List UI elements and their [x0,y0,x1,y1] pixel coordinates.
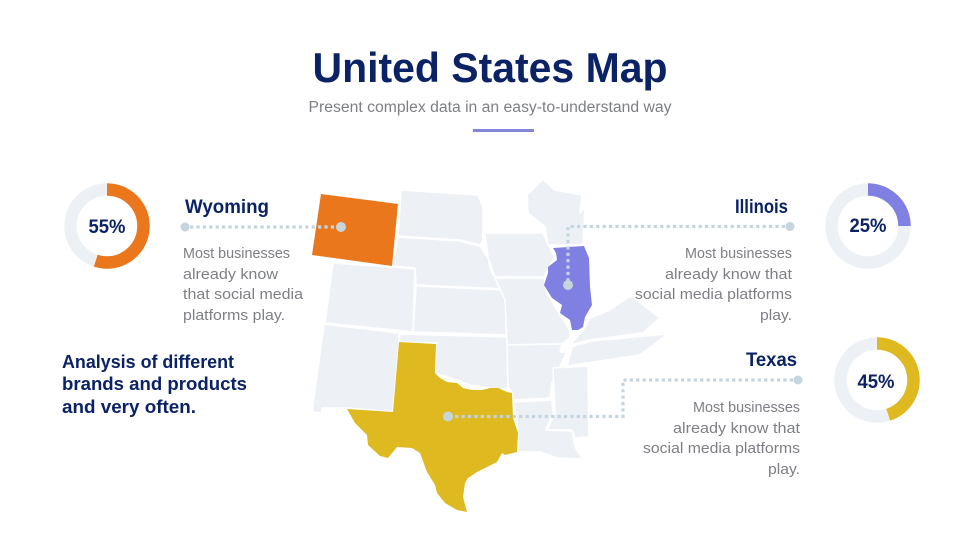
illinois callout [563,197,794,324]
state: Oklahoma [399,334,509,390]
illinois donut: 25% [850,216,887,237]
texas donut [840,344,914,416]
state: South Dakota [398,190,483,245]
illinois callout: Most businesses [685,246,792,262]
state: Missouri [495,278,570,345]
texas callout: social media platforms [643,441,800,457]
state: Iowa [485,233,555,277]
texas callout: play. [768,462,800,478]
wyoming callout [180,197,346,324]
illinois callout: already know that [665,267,792,283]
state: Nebraska [392,237,505,289]
state: Mississippi [547,366,589,438]
state: Kansas [413,286,510,335]
state: Tennessee [567,334,668,366]
map of central United States [312,179,668,512]
texas callout: already know that [673,421,800,437]
illinois callout: play. [760,308,792,324]
texas callout: Texas [746,350,797,371]
analysis text block: and very often. [62,396,196,417]
title: United States Map [312,44,668,91]
texas donut: 45% [858,372,895,393]
analysis text block: Analysis of different [62,351,234,372]
state: Colorado [325,263,415,332]
wyoming callout: platforms play. [183,308,285,324]
wyoming callout: Most businesses [183,246,290,262]
state: Wyoming highlighted [312,194,398,266]
analysis text block: brands and products [62,373,247,394]
title accent bar [473,129,534,132]
illinois callout: social media platforms [635,287,792,303]
wyoming callout: that social media [183,287,304,303]
texas callout: Most businesses [693,400,800,416]
texas callout [443,350,802,478]
state: Illinois highlighted [544,246,592,330]
state: Wisconsin [527,179,585,245]
state: Texas highlighted [347,342,518,512]
wyoming donut [70,190,144,262]
wyoming donut: 55% [88,217,126,238]
illinois donut [832,190,904,262]
wyoming callout: Wyoming [185,197,269,218]
state: Arkansas [507,344,567,400]
illinois callout: Illinois [735,197,788,218]
wyoming callout: already know [183,267,279,283]
subtitle: Present complex data in an easy-to-understand way [308,99,672,116]
state: Kentucky [570,297,660,345]
state: Louisiana [514,400,583,459]
analysis text block [62,351,247,417]
state: New Mexico [312,324,399,413]
